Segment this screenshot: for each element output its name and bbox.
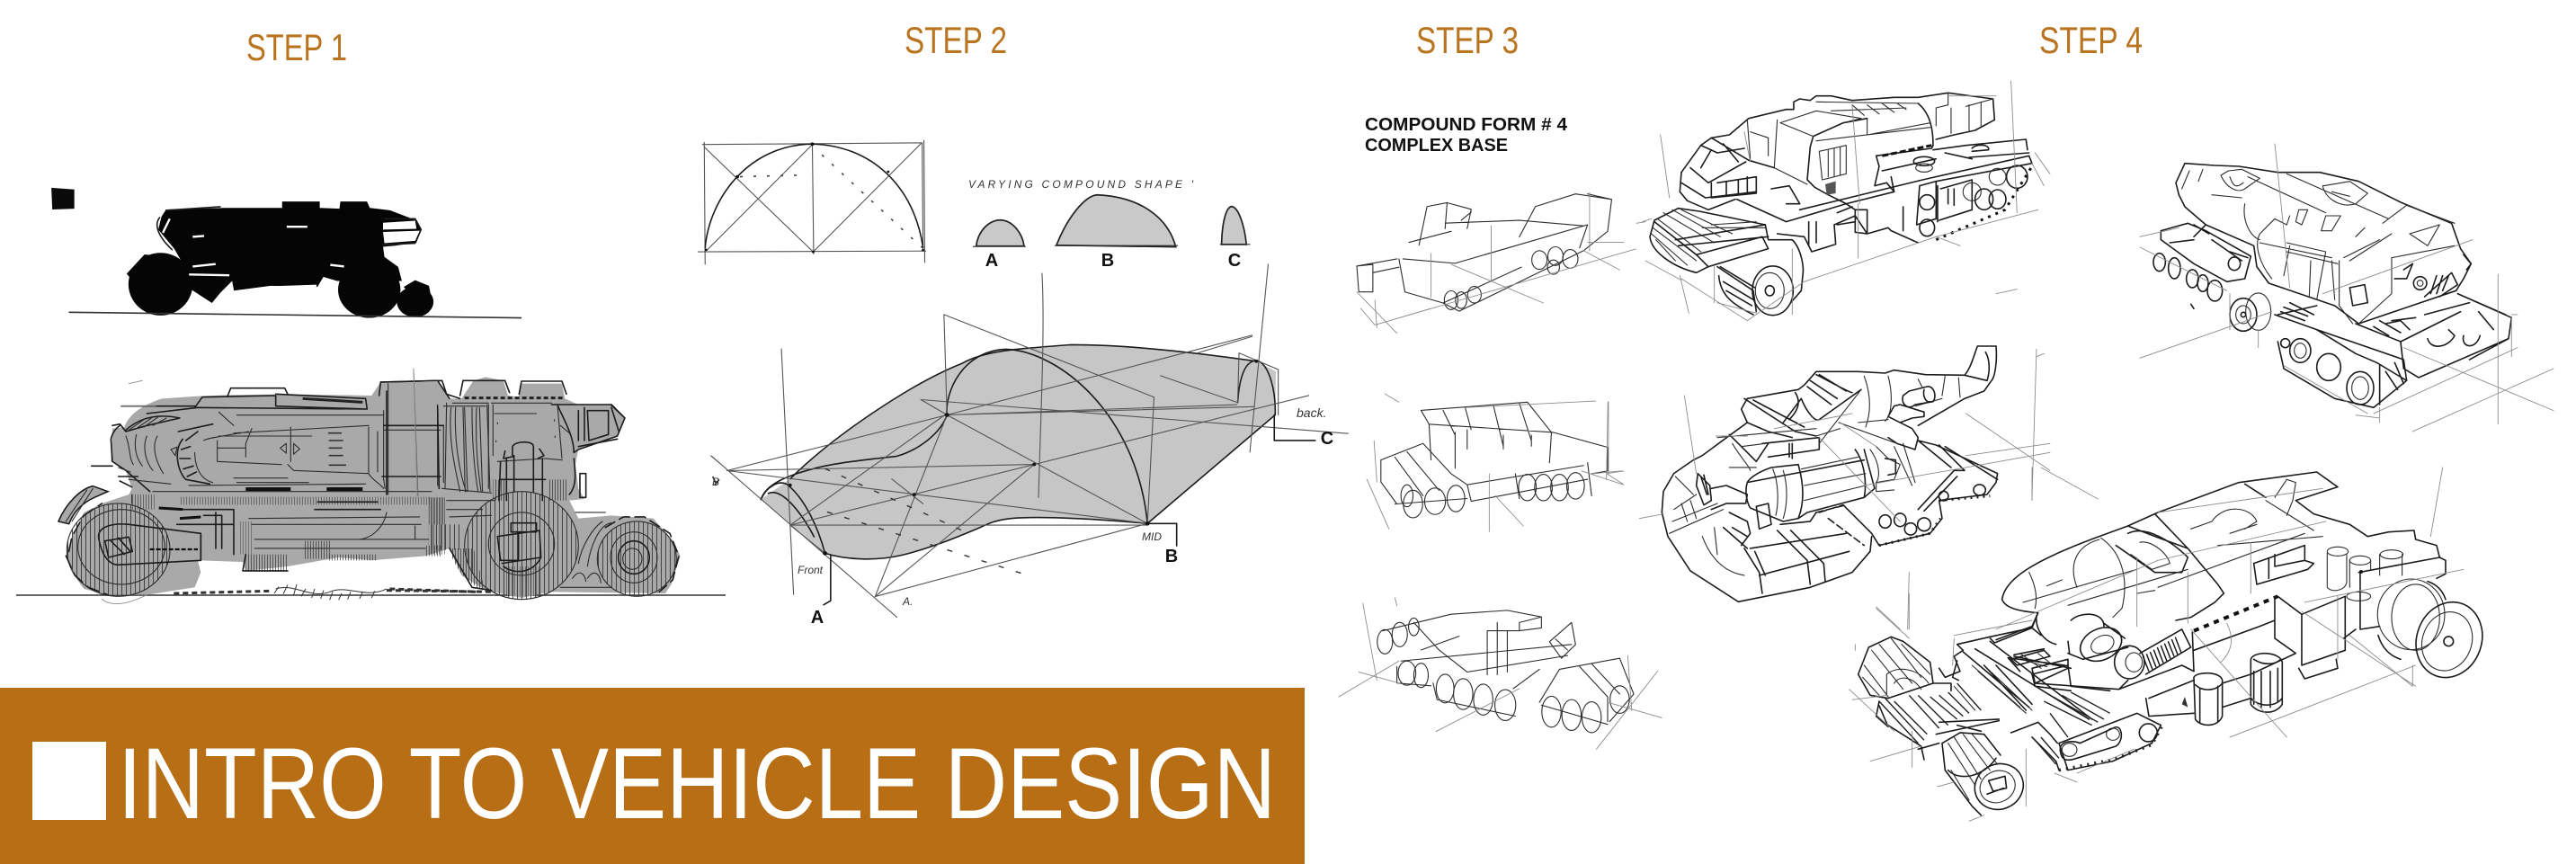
banner title: INTRO TO VEHICLE DESIGN [118, 727, 1276, 840]
box sketch 1 [1357, 192, 1636, 334]
icon: small black swatch [51, 188, 75, 209]
label A large: A [811, 608, 824, 628]
vehicle front half [58, 369, 681, 604]
label A small: A [985, 251, 998, 271]
front wheel [58, 486, 201, 596]
handwritten B mark: B [712, 476, 719, 488]
rear wheels [450, 492, 679, 600]
vehicle: middle plane-tail tank [1607, 346, 2050, 629]
step 2 labels and handwriting [712, 178, 1333, 628]
panel: step 3 simple construction sketches [1339, 192, 1662, 749]
rear hull line work [380, 369, 719, 592]
handwritten caption: VARYING COMPOUND SHAPE ' [968, 178, 1194, 191]
vehicle: bottom racer front section [1996, 468, 2492, 737]
heading: step 1: STEP 1 [246, 26, 347, 68]
construction rectangle with arch [698, 140, 925, 264]
perspective construction lines [712, 264, 1348, 618]
label C small: C [1228, 251, 1241, 271]
black vehicle silhouette [69, 201, 521, 318]
panel: step 2 compound form construction [698, 140, 1348, 618]
heading: step 2: STEP 2 [905, 19, 1007, 61]
panel: step 1 shaded side view [16, 369, 726, 604]
vehicle rear half [380, 369, 719, 600]
handwritten mid: MID [1142, 530, 1162, 543]
compound form caption line 1: COMPOUND FORM # 4 [1365, 115, 1568, 135]
box sketch 2 [1367, 394, 1624, 531]
handwritten front: Front [798, 564, 824, 576]
banner background [0, 688, 1305, 864]
handwritten A mark: A. [902, 595, 913, 608]
handwritten back: back. [1297, 405, 1326, 420]
panel: step 4 detailed vehicles [1607, 81, 2554, 821]
box sketch 3 [1339, 598, 1662, 749]
heading: step 3: STEP 3 [1416, 19, 1519, 61]
ground line [16, 594, 726, 596]
vehicle: bottom racer rear section [1850, 593, 2162, 821]
arch profiles A B C [973, 195, 1250, 247]
label C large: C [1321, 429, 1333, 449]
label B small: B [1101, 251, 1114, 271]
icon: white square [32, 742, 106, 820]
hull line work [92, 369, 495, 604]
banner [0, 688, 1305, 864]
panel: step 1 silhouette [51, 188, 521, 318]
vehicle: upper right fuselage on tracks [2140, 144, 2554, 432]
heading: step 4: STEP 4 [2039, 19, 2143, 61]
vehicle: top tracked tank [1636, 81, 2050, 321]
label B large: B [1165, 547, 1178, 566]
shaded compound form [761, 344, 1276, 559]
compound form caption line 2: COMPLEX BASE [1365, 136, 1508, 156]
